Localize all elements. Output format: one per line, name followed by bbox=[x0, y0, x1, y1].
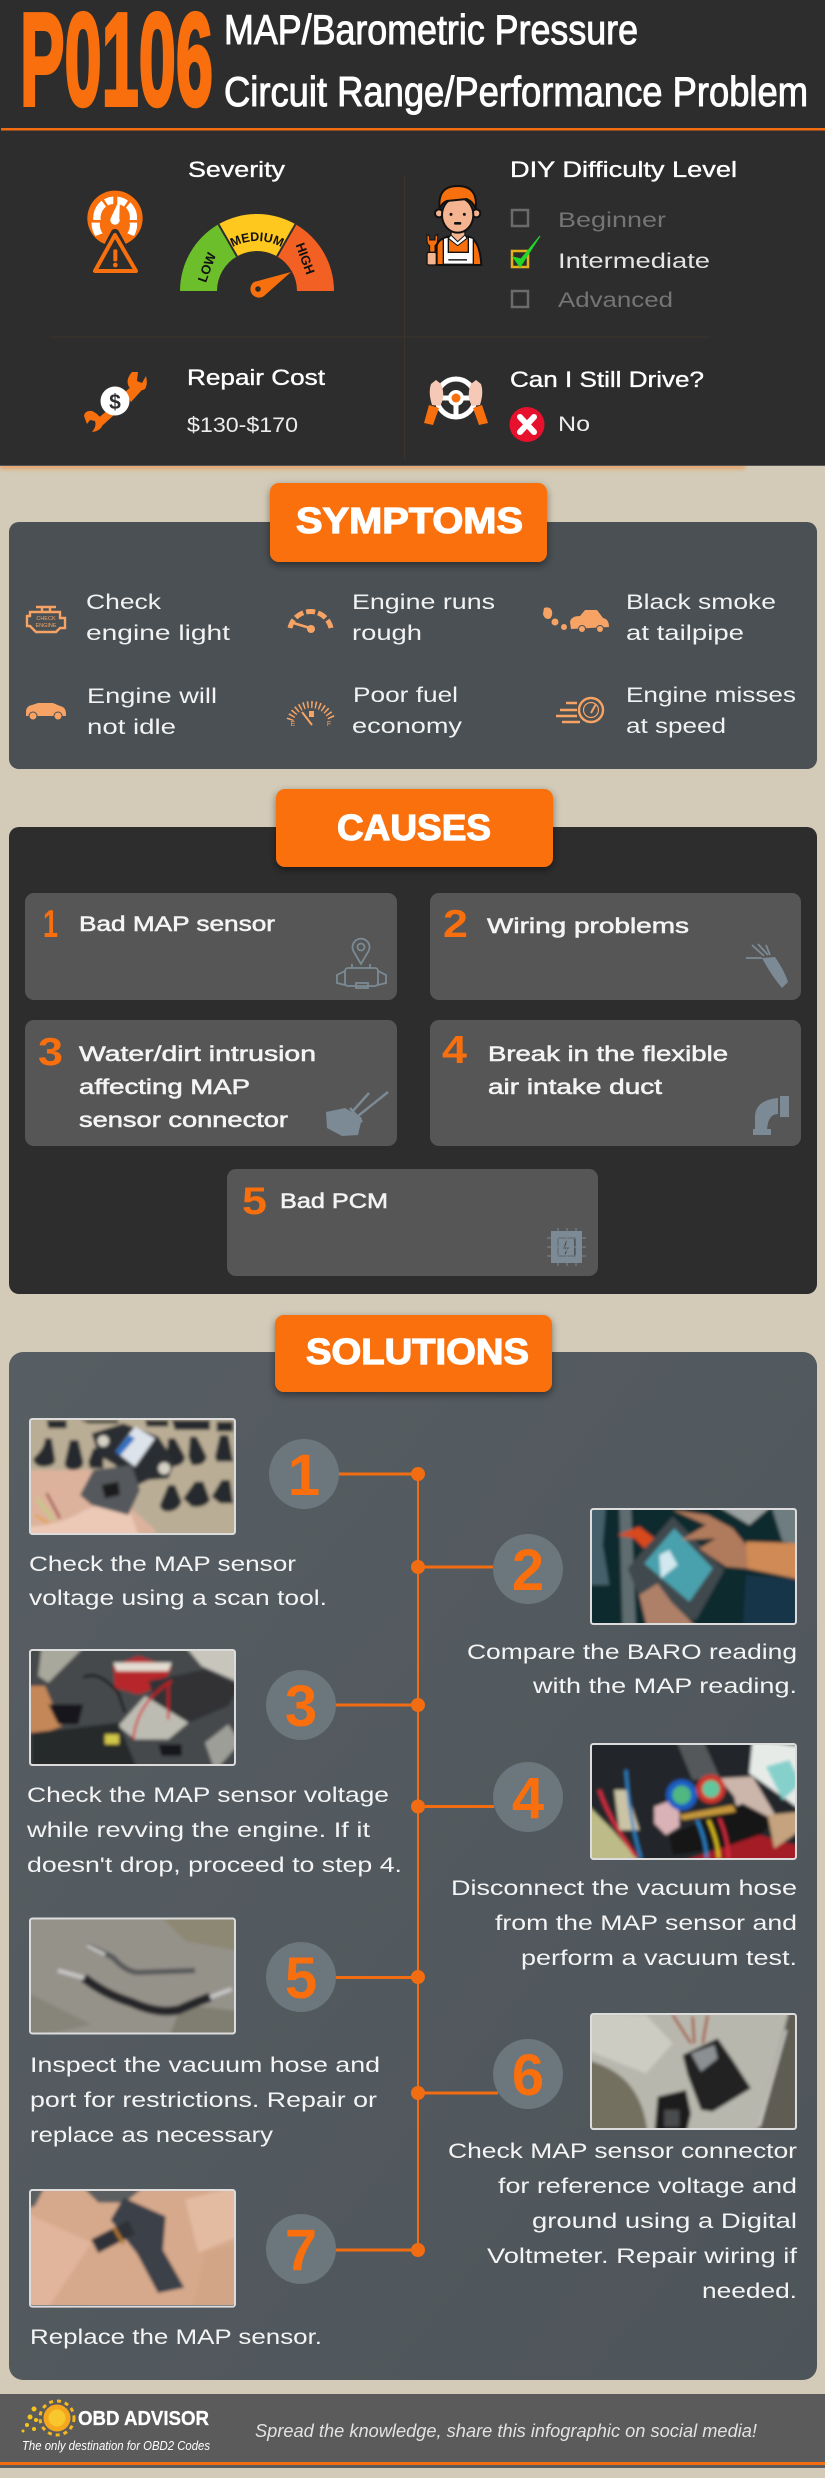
step 6 text: for reference voltage and bbox=[498, 2175, 797, 2198]
step 3 text: doesn't drop, proceed to step 4. bbox=[27, 1854, 402, 1877]
symptom: check engine light: Check bbox=[86, 591, 162, 614]
panel: causes bbox=[9, 789, 817, 1294]
step 1 text: voltage using a scan tool. bbox=[29, 1587, 327, 1610]
severity gauge: HIGH bbox=[293, 241, 318, 276]
symptom: check engine light: engine light bbox=[86, 622, 230, 645]
header band bbox=[0, 0, 825, 472]
step 1 text bbox=[29, 1553, 327, 1610]
symptom: engine misses at speed: Engine misses bbox=[626, 684, 796, 707]
photo: vacuum hoses on concrete bbox=[25, 1914, 240, 2039]
symptoms tab: SYMPTOMS bbox=[296, 500, 523, 541]
step 2 text: with the MAP reading. bbox=[532, 1675, 797, 1698]
photo: MAP sensor connector bbox=[586, 2010, 801, 2135]
step 4 text bbox=[451, 1877, 797, 1970]
photo: manifold gauges bbox=[586, 1740, 801, 1865]
step 3 bbox=[25, 1646, 402, 1877]
symptom: check engine light: CHECK bbox=[36, 616, 56, 622]
symptom: black smoke at tailpipe: Black smoke bbox=[626, 591, 776, 614]
step 5 bbox=[25, 1914, 380, 2147]
panel: symptoms bbox=[9, 483, 817, 769]
icon: wrench and dollar bbox=[84, 372, 147, 432]
symptom: engine runs rough: Engine runs bbox=[352, 591, 495, 614]
step 6 text: Voltmeter. Repair wiring if bbox=[487, 2245, 797, 2268]
symptom: poor fuel economy: Poor fuel bbox=[353, 684, 458, 707]
step 7 text: Replace the MAP sensor. bbox=[30, 2326, 322, 2349]
symptom: check engine light bbox=[27, 591, 230, 645]
step 4 text: from the MAP sensor and bbox=[495, 1912, 797, 1935]
symptom: black smoke at tailpipe bbox=[543, 591, 776, 645]
cause 3: 3 bbox=[38, 1031, 63, 1074]
checkbox list: Advanced bbox=[558, 289, 673, 312]
symptom: poor fuel economy: E bbox=[291, 721, 296, 728]
symptom: check engine light: ENGINE bbox=[35, 623, 57, 629]
symptom: engine will not idle: not idle bbox=[87, 716, 176, 739]
cause 5 bbox=[227, 1169, 598, 1276]
logo name: OBD ADVISOR bbox=[78, 2408, 210, 2430]
number badge 5 bbox=[266, 1942, 336, 2012]
share message: Spread the knowledge, share this infographic on social media! bbox=[255, 2421, 757, 2441]
number badge 1 bbox=[269, 1439, 339, 1509]
number badge 3: 3 bbox=[285, 1674, 317, 1739]
checkbox list bbox=[512, 209, 710, 312]
cause 1: 1 bbox=[43, 903, 58, 946]
checkbox list: Intermediate bbox=[558, 250, 710, 273]
cause 3: affecting MAP bbox=[79, 1076, 250, 1099]
photo: scan tool tablet bbox=[586, 1505, 801, 1630]
number badge 2 bbox=[493, 1534, 563, 1604]
step 6 text bbox=[448, 2140, 797, 2303]
symptom: engine runs rough bbox=[290, 591, 495, 645]
number badge 3 bbox=[266, 1670, 336, 1740]
solutions tab bbox=[275, 1315, 552, 1392]
severity gauge bbox=[180, 214, 334, 298]
number badge 6: 6 bbox=[512, 2043, 544, 2108]
step 6 text: ground using a Digital bbox=[532, 2210, 797, 2233]
gauge needle bbox=[250, 272, 291, 298]
cause 2 bbox=[430, 893, 801, 1000]
cause 4: air intake duct bbox=[488, 1076, 662, 1099]
step 3 text: Check the MAP sensor voltage bbox=[27, 1784, 389, 1807]
number badge 7 bbox=[266, 2214, 336, 2284]
step 1 bbox=[25, 1415, 339, 1610]
icon: mechanic bbox=[427, 186, 481, 265]
repair cost heading: Repair Cost bbox=[187, 365, 325, 390]
severity gauge: MEDIUM bbox=[230, 232, 284, 247]
photo: MAP sensor in hand bbox=[25, 1415, 240, 1540]
symptom: poor fuel economy: economy bbox=[352, 715, 463, 738]
cause 2: 2 bbox=[443, 903, 468, 946]
cause 3 bbox=[25, 1020, 397, 1146]
step 2 text: Compare the BARO reading bbox=[467, 1641, 797, 1664]
symptoms tab bbox=[270, 483, 547, 562]
icon: steering wheel with hands bbox=[424, 379, 488, 425]
icon: severity gauge with warning bbox=[87, 191, 143, 272]
step 3 text: while revving the engine. If it bbox=[26, 1819, 370, 1842]
number badge 7: 7 bbox=[285, 2218, 317, 2283]
step 6 bbox=[448, 2010, 801, 2303]
answer no: No bbox=[558, 413, 590, 436]
checkbox list: Beginner bbox=[558, 209, 666, 232]
icon: wrench and dollar: $ bbox=[109, 391, 121, 414]
title line 1: MAP/Barometric Pressure bbox=[224, 6, 638, 53]
symptom: poor fuel economy bbox=[290, 684, 463, 738]
step 2 bbox=[467, 1505, 801, 1698]
step 4 bbox=[451, 1740, 801, 1970]
timeline connector bbox=[334, 1467, 498, 2257]
cause 3: Water/dirt intrusion bbox=[79, 1043, 316, 1066]
number badge 2: 2 bbox=[512, 1538, 544, 1603]
cause 4 bbox=[430, 1020, 801, 1146]
title divider bbox=[1, 128, 825, 130]
cause 3: sensor connector bbox=[79, 1109, 288, 1132]
step 5 text bbox=[30, 2054, 380, 2147]
step 1 text: Check the MAP sensor bbox=[29, 1553, 296, 1576]
step 3 text bbox=[26, 1784, 402, 1877]
can I still drive heading: Can I Still Drive? bbox=[510, 367, 704, 392]
repair cost value: $130-$170 bbox=[187, 414, 298, 437]
number badge 1: 1 bbox=[288, 1443, 320, 1508]
symptom: black smoke at tailpipe: at tailpipe bbox=[626, 622, 744, 645]
symptom: poor fuel economy: F bbox=[327, 721, 331, 728]
cause 1: Bad MAP sensor bbox=[79, 913, 275, 936]
causes tab: CAUSES bbox=[337, 807, 491, 848]
cause 5: 5 bbox=[242, 1180, 267, 1223]
severity heading: Severity bbox=[188, 157, 285, 182]
photo: engine bay with meter bbox=[25, 1646, 240, 1771]
cause 1 bbox=[25, 893, 397, 1000]
step 4 text: Disconnect the vacuum hose bbox=[451, 1877, 797, 1900]
step 7 bbox=[25, 2186, 336, 2349]
step 5 text: replace as necessary bbox=[30, 2124, 274, 2147]
symptom: engine misses at speed bbox=[556, 684, 796, 738]
step 4 text: perform a vacuum test. bbox=[521, 1947, 797, 1970]
number badge 5: 5 bbox=[285, 1946, 317, 2011]
causes tab bbox=[276, 789, 553, 867]
cause 4: Break in the flexible bbox=[488, 1043, 728, 1066]
cause 4: 4 bbox=[442, 1029, 467, 1072]
symptom: engine misses at speed: at speed bbox=[626, 715, 726, 738]
number badge 6 bbox=[493, 2039, 563, 2109]
step 2 text bbox=[467, 1641, 797, 1698]
symptom: engine will not idle: Engine will bbox=[87, 685, 217, 708]
step 5 text: Inspect the vacuum hose and bbox=[30, 2054, 380, 2077]
symptom: engine runs rough: rough bbox=[352, 622, 422, 645]
cause 5: Bad PCM bbox=[280, 1190, 388, 1213]
step 5 text: port for restrictions. Repair or bbox=[30, 2089, 377, 2112]
DIY difficulty heading: DIY Difficulty Level bbox=[510, 157, 737, 182]
symptom: engine will not idle bbox=[26, 685, 217, 739]
number badge 4 bbox=[493, 1762, 563, 1832]
step 6 text: Check MAP sensor connector bbox=[448, 2140, 797, 2163]
footer bbox=[0, 2394, 825, 2468]
step 6 text: needed. bbox=[702, 2280, 797, 2303]
number badge 4: 4 bbox=[512, 1766, 544, 1831]
cause 2: Wiring problems bbox=[487, 915, 689, 938]
photo: MAP sensor on palm bbox=[25, 2186, 240, 2313]
logo gear bbox=[22, 2401, 74, 2435]
panel: solutions bbox=[9, 1315, 817, 2380]
logo tagline: The only destination for OBD2 Codes bbox=[22, 2438, 210, 2453]
severity gauge: LOW bbox=[195, 250, 219, 284]
solutions tab: SOLUTIONS bbox=[306, 1331, 529, 1372]
icon: red no mark bbox=[510, 407, 544, 442]
